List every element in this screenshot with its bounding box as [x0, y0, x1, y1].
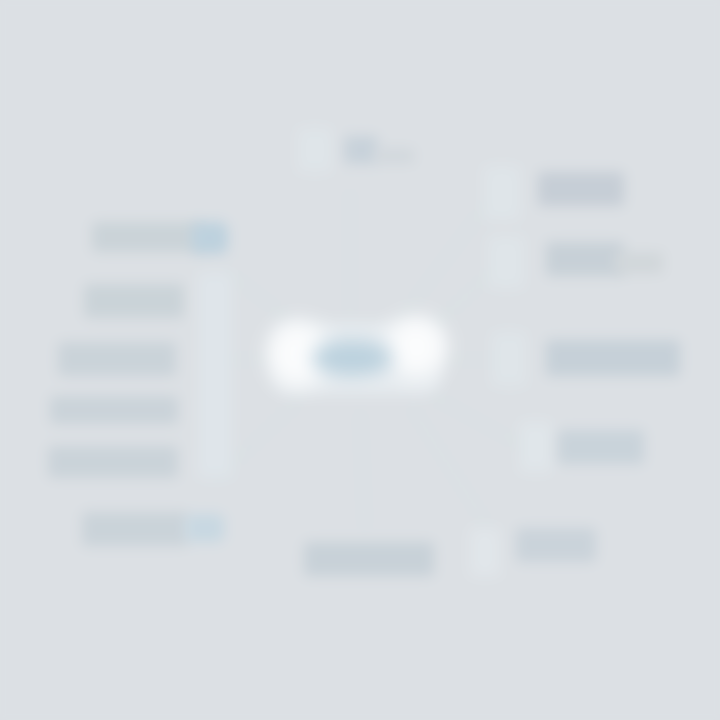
label — [516, 528, 596, 562]
label — [344, 136, 378, 164]
label — [546, 242, 624, 276]
right branch 1 — [484, 166, 624, 220]
label tail — [615, 252, 663, 274]
icon tile — [298, 128, 332, 172]
label — [50, 396, 178, 424]
label tail — [376, 148, 414, 164]
top branch — [298, 128, 414, 172]
label — [546, 340, 680, 376]
node label — [312, 341, 392, 375]
icon — [186, 514, 224, 542]
right branch 4 — [520, 422, 644, 472]
icon tile — [488, 236, 524, 288]
left white lobe — [268, 322, 328, 386]
right white lobe — [386, 317, 446, 377]
label — [48, 446, 178, 478]
icon tile — [492, 332, 526, 386]
label — [558, 430, 644, 464]
icon tile — [470, 528, 500, 576]
right branch 2 — [488, 236, 663, 288]
left branch 1 — [92, 222, 228, 254]
bottom branch — [304, 542, 434, 576]
central node — [268, 317, 446, 394]
left branch 2 — [84, 284, 184, 318]
left branch 5 — [48, 446, 178, 478]
right branch 5 — [470, 528, 596, 576]
label — [58, 342, 176, 376]
left branch 4 — [50, 396, 178, 424]
node background — [272, 322, 442, 394]
right branch 3 — [492, 332, 680, 386]
label — [92, 222, 202, 252]
label — [538, 172, 624, 206]
icon tile — [484, 166, 520, 220]
icon — [192, 222, 228, 254]
label — [84, 284, 184, 318]
left column of icon tiles — [198, 272, 232, 478]
left branch 3 — [58, 342, 176, 376]
left branch 6 — [82, 512, 224, 546]
icon tile — [520, 422, 552, 472]
label — [82, 512, 188, 546]
connector lines — [215, 190, 530, 530]
label — [304, 542, 434, 576]
